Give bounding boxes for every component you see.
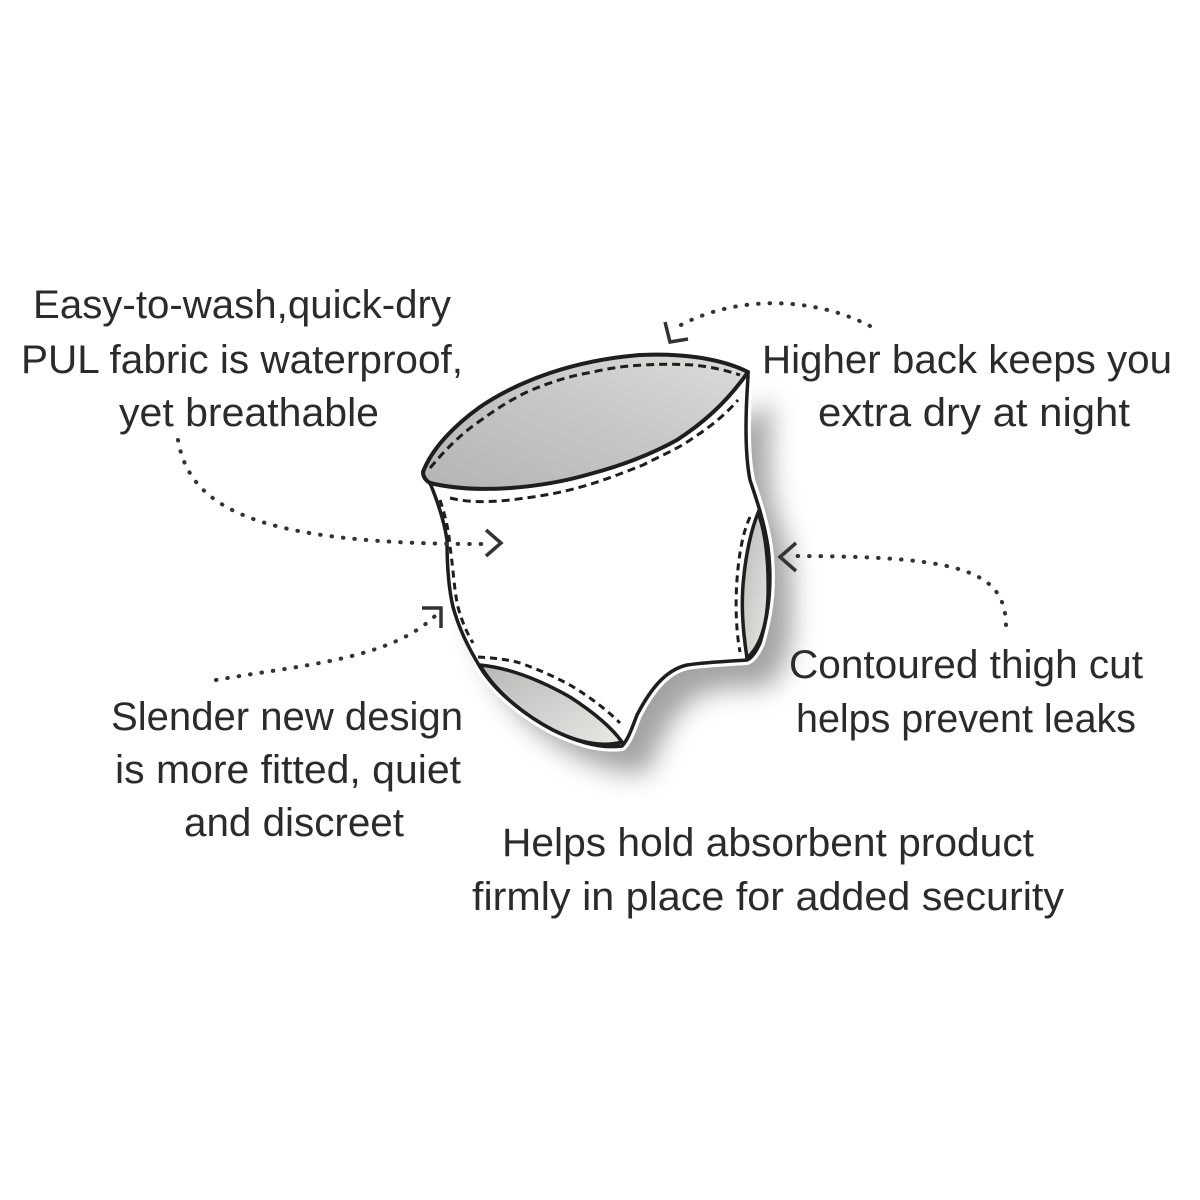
arrow: to slender design	[216, 608, 441, 680]
text: fabric callout	[21, 283, 463, 435]
left side stitches	[440, 500, 473, 643]
text: slender design callout: is more fitted, quiet	[115, 748, 461, 792]
arrow: to higher back	[665, 303, 870, 342]
arrow: to waterproof fabric	[178, 440, 501, 556]
icon: brief garment illustration	[423, 355, 792, 773]
text: higher back callout: extra dry at night	[818, 391, 1130, 435]
right thigh stitches	[736, 517, 750, 652]
waist opening	[423, 355, 748, 489]
text: thigh cut callout: Contoured thigh cut	[789, 643, 1143, 687]
waist opening stitches	[430, 364, 740, 468]
text: higher back callout	[762, 338, 1172, 435]
garment halo	[470, 372, 770, 747]
bottom thigh opening	[480, 665, 622, 744]
text: fabric callout: yet breathable	[119, 391, 379, 435]
text: thigh cut callout	[789, 643, 1143, 741]
garment body	[423, 355, 770, 747]
waist outer stitches	[450, 400, 738, 502]
arrow: to thigh cut	[780, 543, 1006, 625]
text: fabric callout: PUL fabric is waterproof,	[21, 338, 463, 382]
text: higher back callout: Higher back keeps you	[762, 338, 1172, 382]
text: slender design callout	[111, 695, 463, 845]
text: slender design callout: Slender new design	[111, 695, 463, 739]
text: thigh cut callout: helps prevent leaks	[796, 697, 1136, 741]
text: absorbent product callout: firmly in place for added security	[472, 875, 1064, 919]
text: slender design callout: and discreet	[184, 801, 404, 845]
text: absorbent product callout	[472, 821, 1064, 919]
garment drop shadow	[472, 401, 792, 773]
text: fabric callout: Easy-to-wash,quick-dry	[33, 283, 451, 327]
text: absorbent product callout: Helps hold absorbent product	[502, 821, 1034, 865]
bottom thigh stitches	[478, 657, 620, 723]
right thigh opening	[742, 513, 768, 658]
